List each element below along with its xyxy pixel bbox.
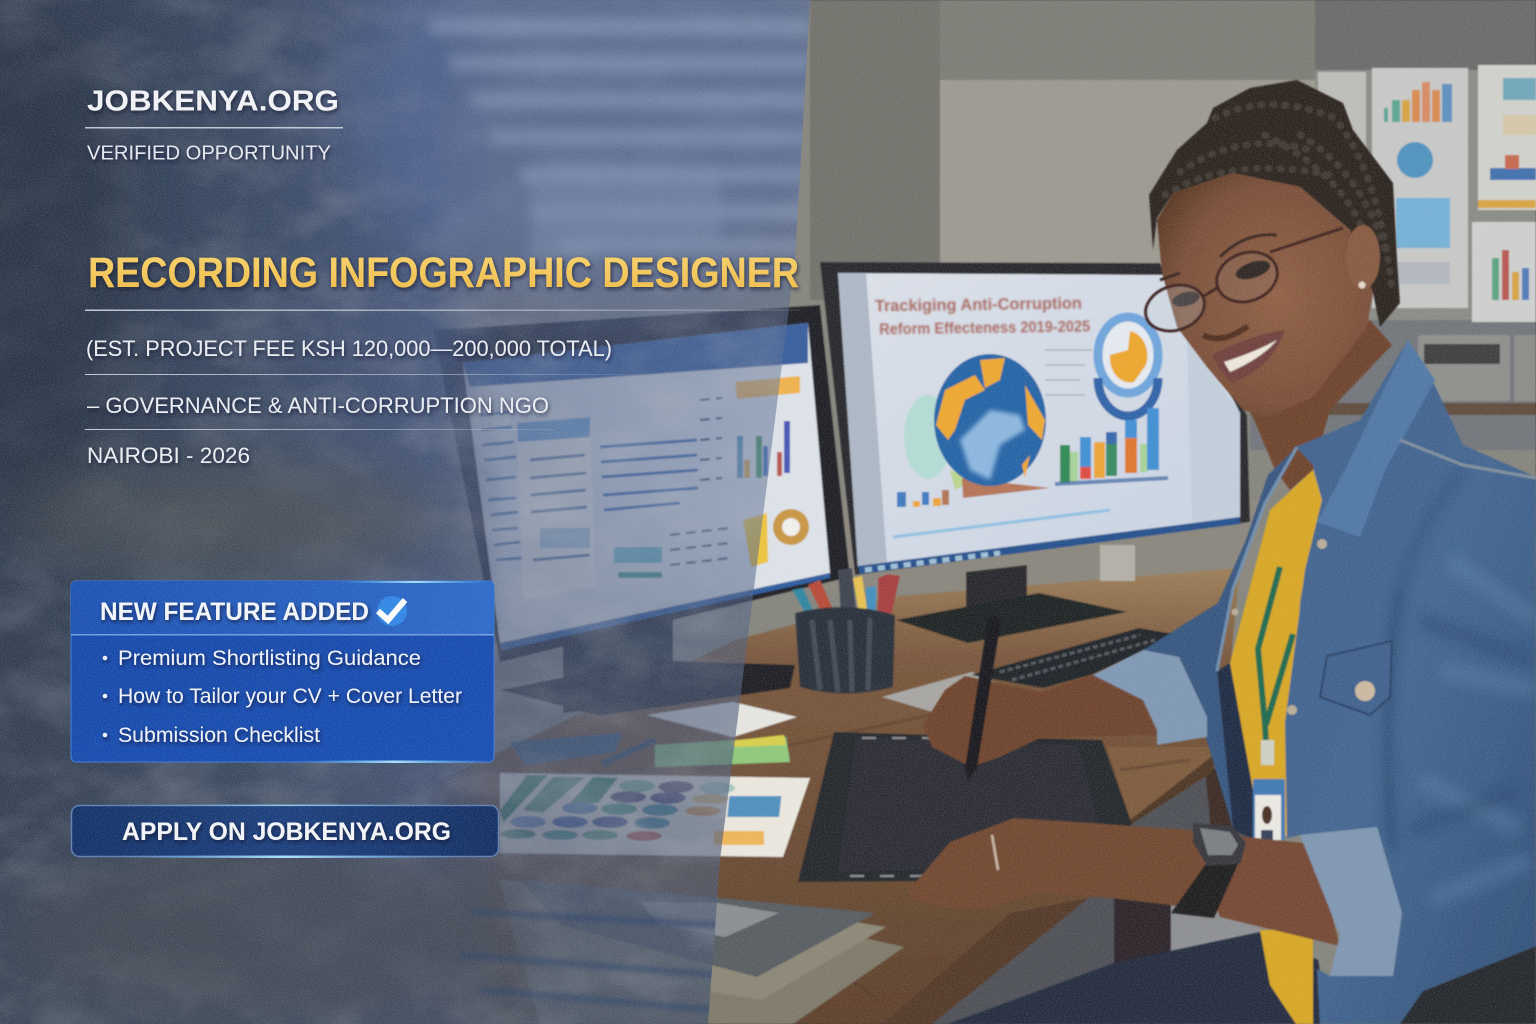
monitor heading text [875,293,1090,338]
jacket buttons [1232,539,1327,715]
head [1140,80,1400,417]
chair [1400,946,1536,1024]
left jacket panel and sleeve [1143,447,1297,828]
organisation: – GOVERNANCE & ANTI-CORRUPTION NGO [87,393,549,418]
globe chart [904,354,1050,498]
monitor heading text: Trackiging Anti-Corruption [875,294,1082,315]
pencil cup [792,568,900,694]
jacket folds [1388,470,1536,900]
wall posters with charts [1318,65,1536,322]
right hand [909,818,1207,908]
panel heading: NEW FEATURE ADDED [100,598,369,626]
rolled right cuff [1300,827,1402,976]
spreadsheet charts [735,376,809,567]
ear [1346,225,1380,289]
monitor heading text: Reform Effecteness 2019-2025 [879,318,1090,338]
job title: RECORDING INFOGRAPHIC DESIGNER [88,249,799,297]
sidebar rows [480,412,522,560]
spreadsheet rows [600,440,698,510]
neck [1250,320,1392,490]
yellow shirt [1230,470,1322,1024]
glasses [1140,228,1343,338]
location: NAIROBI - 2026 [87,443,250,468]
spiral notebook and pen [510,733,655,765]
yoke seam [1400,440,1536,478]
feature list: How to Tailor your CV + Cover Letter [118,684,462,708]
feature list [103,646,462,747]
jeans [948,932,1330,1024]
desk [300,545,1240,1024]
brand block [87,86,339,164]
notebook stack [500,880,904,1024]
under desk floor [880,760,1260,1024]
sticky notes and notepad [647,702,797,767]
right monitor [820,262,1250,575]
drawing tablet [798,732,1132,882]
project fee: (EST. PROJECT FEE KSH 120,000—200,000 TOTAL) [86,336,612,361]
smile [1212,330,1285,383]
panel: new feature added [71,581,494,763]
rolled left cuff [1093,650,1207,745]
icon: check badge [377,596,407,626]
face [1157,173,1373,417]
lanyard and ID badge [1253,567,1293,840]
left panel overlay with blinds texture [0,0,900,1024]
left monitor [433,305,850,662]
left monitor stand [500,620,795,716]
right forearm [1189,830,1340,946]
document panel [517,417,596,600]
watch [1171,823,1246,918]
right monitor stand [896,565,1127,643]
hair [1149,80,1400,327]
background printer [1418,335,1536,401]
inner jacket placket [1217,663,1256,840]
denim jacket [1285,340,1536,1024]
verified tagline: VERIFIED OPPORTUNITY [87,142,331,164]
chest pocket [1320,641,1392,715]
jacket collar [1317,340,1435,537]
apply button: APPLY ON JOBKENYA.ORG [122,818,451,846]
person [909,80,1536,1024]
bar chart [897,350,1168,507]
brand name: JOBKENYA.ORG [87,86,339,118]
feature list: Submission Checklist [118,723,320,747]
ring [992,835,998,870]
keyboard and laptop [882,628,1179,713]
swatch sheet [500,773,810,857]
apply button [72,804,498,858]
nose [1203,326,1248,338]
job details [86,336,612,468]
taskbar icons [865,553,1000,570]
left forearm and hand [923,672,1158,767]
eyes [1233,257,1273,283]
feature list: Premium Shortlisting Guidance [118,646,421,670]
eyebrows [1160,235,1277,280]
donut chart [1098,317,1158,416]
stylus pen [965,616,1001,781]
